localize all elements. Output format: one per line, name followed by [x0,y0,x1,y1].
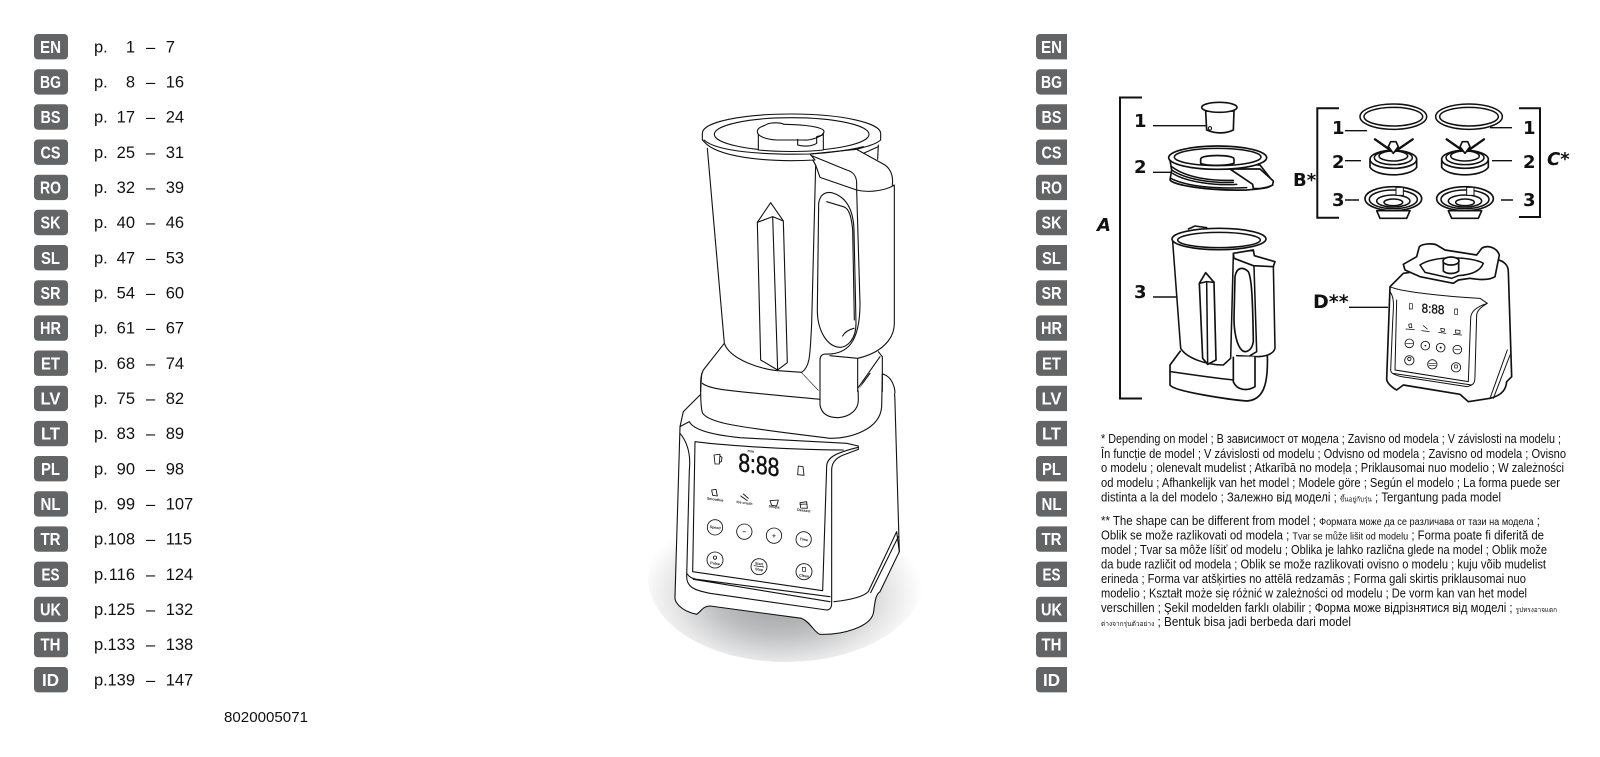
row SK: – [146,214,156,232]
display [1409,301,1458,317]
ground shadow [648,494,924,662]
row BG: 16 [166,73,184,91]
panel buttons: Start [755,561,764,567]
footnote: shape can be different: erineda ; Forma var atšķirties no attēlā redzamās ; Forma gali skirtis priklausomai nuo [1101,572,1526,586]
brackets and labels: C* [1547,149,1570,170]
row LV: LV [40,388,61,408]
row SR: – [146,285,156,303]
tab ES [1036,562,1067,587]
row LT: p. [94,425,108,443]
panel buttons: Stop [755,567,764,572]
footnote: depending on model: distinta a la del modelo ; Залежно від моделі ; ขึ้นอยู่กับรุ่น ; Tergantung pada model [1101,490,1501,504]
row UK: – [146,601,156,619]
panel buttons [707,520,812,580]
tab PL [1036,456,1067,481]
tab LT [1036,421,1067,446]
row CS: – [146,144,156,162]
row ID: – [146,671,156,689]
row PL: – [146,460,156,478]
row PL: 98 [166,460,184,478]
row HR: p. [94,320,108,338]
row BS: BS [40,107,60,127]
row PL: 90 [117,460,135,478]
tab RO [1036,175,1067,200]
tab TR [1036,526,1067,552]
panel buttons: − [742,529,746,536]
row SR: p. [94,285,108,303]
bracket and labels: 1 [1134,111,1147,132]
row SK: SK [40,213,61,233]
jug [701,114,894,392]
label and leader [1313,291,1388,313]
blade assembly C [1442,139,1488,175]
tab SK: SK [1042,213,1062,233]
row ID: ID [42,670,59,690]
brackets and labels: 1 [1523,118,1536,139]
row CS: CS [40,142,60,162]
row NL: NL [40,494,61,514]
tab SR: SR [1042,283,1062,303]
row SR: 54 [117,285,135,303]
row RO: p. [94,179,108,197]
jug handle opening [817,192,856,347]
row ES: 124 [166,566,193,584]
seal rings [1360,104,1502,129]
tab TR: TR [1042,529,1062,549]
panel icons [712,454,807,508]
row ID: p. [94,671,108,689]
row LV [34,386,184,411]
tab LT: LT [1042,424,1061,444]
footnote: shape can be different: modelio ; Kształt może się różnić w zależności od modelu ; De vorm kan van het model [1101,586,1527,600]
footnote: depending on model: od modelu ; Afhankelijk van het model ; Modele göre ; Según el modelo ; La forma puede ser [1101,476,1560,490]
parts groups B and C [1293,104,1570,218]
row LV: – [146,390,156,408]
tab BG: BG [1041,72,1062,92]
jug seat [701,373,895,438]
label and leader: D** [1313,291,1349,313]
row ET: ET [41,353,60,373]
row UK [34,597,193,622]
row SL: 53 [166,249,184,267]
row ET: – [146,355,156,373]
panel mode labels [707,497,811,514]
panel buttons: Pulse [710,561,720,566]
brackets and labels: B* [1293,170,1317,191]
row HR: HR [40,318,61,338]
tab ET [1036,350,1067,376]
row SR [34,280,184,306]
row ES: 116 [109,566,135,584]
small jug [1170,226,1275,401]
row BS: p. [94,109,108,127]
footnote: shape can be different [1101,514,1557,629]
display: 8:88 [1422,301,1444,317]
blender base with control panel [675,370,899,634]
seat handle block [820,370,858,418]
row TH [34,632,193,657]
row TR: 108 [107,531,135,549]
row ET: p. [94,355,108,373]
row SL: SL [41,248,60,268]
row NL [34,491,193,517]
row ES: p. [94,566,108,584]
row LT: 83 [117,425,135,443]
row SL [34,245,184,270]
tab ET: ET [1042,353,1061,373]
tab RO: RO [1041,178,1062,198]
row TH: TH [40,635,60,655]
row EN: 7 [166,38,175,56]
row ID: 139 [107,671,135,689]
jug rim [702,114,881,161]
tab LV [1036,386,1067,411]
footnote: depending on model [1100,432,1566,504]
tab HR [1036,315,1067,341]
row LT [34,421,184,446]
bracket and labels: A [1095,215,1111,236]
row LV: 82 [166,390,184,408]
panel mode labels: Dessert [797,508,811,514]
row ID [34,667,193,692]
panel display: min [747,449,754,454]
part D: motor base [1313,244,1512,402]
row TR: p. [94,531,108,549]
row BG [34,69,184,95]
row TR: 115 [166,531,192,549]
tab LV: LV [1042,388,1062,408]
row NL: 107 [166,496,193,514]
footnote: shape can be different: ต่างจากรุ่นตัวอย่าง ; Bentuk bisa jadi berbeda dari model [1101,615,1351,629]
locking ring C [1437,187,1493,218]
drive top [1403,244,1499,283]
tab TH: TH [1042,635,1062,655]
row ES [34,562,193,587]
row TR: TR [40,529,61,549]
panel mode labels: Soups [768,504,780,510]
panel display: 8:88 [738,447,779,483]
row ID: 147 [166,671,193,689]
row LT: – [146,425,156,443]
row EN: – [146,38,156,56]
row BS: 24 [166,109,184,127]
row RO: 39 [166,179,184,197]
row RO [34,175,184,200]
tab SL: SL [1042,248,1061,268]
row HR: – [146,320,156,338]
row EN: p. [94,38,108,56]
row CS: p. [94,144,108,162]
row ET: 68 [117,355,135,373]
row RO: 32 [117,179,135,197]
row UK: 125 [107,601,135,619]
brackets and labels: 2 [1332,152,1345,173]
row CS: 25 [117,144,135,162]
brackets and labels: 1 [1332,118,1345,139]
row EN [34,34,175,59]
row HR [34,315,184,341]
language index: left column [34,34,193,692]
panel mode labels: Smoothie [707,497,724,503]
row ES: – [146,566,156,584]
bracket and labels: 3 [1134,282,1147,303]
lid [1169,146,1273,190]
row LT: LT [41,424,60,444]
row SK: 46 [166,214,184,232]
tab SL [1036,245,1067,270]
tab PL: PL [1042,459,1061,479]
cap [1202,102,1237,133]
row SK: 40 [117,214,135,232]
row TH: 138 [166,636,193,654]
brackets and labels: 3 [1332,190,1345,211]
row TR: – [146,531,156,549]
tab NL [1036,491,1067,517]
row SR: SR [40,283,61,303]
row BS [34,104,184,130]
footnote: shape can be different: ** The shape can be different from model ; Формата може да се различава от тази на модела ; [1101,514,1540,528]
row BG: 8 [126,73,135,91]
tab UK [1036,597,1067,622]
tab BS: BS [1042,107,1062,127]
row BG: BG [40,72,61,92]
row NL: – [146,496,156,514]
row CS: 31 [166,144,184,162]
row TH: p. [94,636,108,654]
row EN: 1 [126,38,135,56]
tab SR [1036,280,1067,306]
row LV: p. [94,390,108,408]
panel mode labels: Ice crush [736,500,753,506]
brackets and labels: 2 [1523,152,1536,173]
locking ring B [1365,187,1422,218]
body [1387,260,1512,402]
row NL: p. [94,496,108,514]
row HR: 61 [117,320,135,338]
row RO: RO [40,178,61,198]
row HR: 67 [166,320,184,338]
blade assembly B [1370,139,1417,175]
tab TH [1036,632,1067,657]
row SL: 47 [117,249,135,267]
tab HR: HR [1041,318,1062,338]
brackets and labels: 3 [1523,190,1536,211]
tab UK: UK [1041,600,1062,620]
footnote: shape can be different: model ; Tvar sa môže líšiť od modelu ; Oblika je lahko različna glede na model ; Oblik može [1101,543,1547,557]
footnote: shape can be different: verschillen ; Şekil modelden farklı olabilir ; Форма може відрізнятися від моделі ; รูปทรงอาจแตก [1101,601,1557,615]
panel buttons: Time [799,537,808,542]
row ET: 74 [166,355,184,373]
row BS: – [146,109,156,127]
tab EN: EN [1041,37,1062,57]
row BS: 17 [117,109,135,127]
row PL [34,456,184,481]
row ET [34,350,184,376]
row UK: 132 [166,601,193,619]
row SK [34,210,184,235]
tab SK [1036,210,1067,235]
row SR: 60 [166,285,184,303]
right-side language tabs [1036,34,1067,692]
row UK: UK [40,600,61,620]
tab ES: ES [1042,564,1060,584]
tab CS [1036,140,1067,165]
row PL: PL [41,459,60,479]
tab NL: NL [1042,494,1062,514]
buttons [1405,339,1462,372]
tab BG [1036,69,1067,95]
main blender illustration [648,114,924,662]
row SK: p. [94,214,108,232]
tab ID: ID [1043,670,1060,690]
row CS [34,140,184,165]
panel buttons: + [772,533,776,540]
row LT: 89 [166,425,184,443]
row UK: p. [94,601,108,619]
row RO: – [146,179,156,197]
brackets and labels [1293,108,1570,218]
panel trim [1390,287,1510,398]
mode icons [1406,324,1462,335]
part 1: cap, part 2: lid, part 3: jug [1169,102,1275,401]
row LV: 75 [117,390,135,408]
row PL: p. [94,460,108,478]
row SL: – [146,249,156,267]
tab EN [1036,34,1067,59]
footnote: shape can be different: Oblik se može razlikovati od modela ; Tvar se může lišit od modelu ; Forma poate fi diferită de [1101,528,1544,542]
row TH: – [146,636,156,654]
tab ID [1036,667,1067,692]
row EN: EN [40,37,61,57]
row SL: p. [94,249,108,267]
footnote: shape can be different: da bude različit od modela ; Oblik se može razlikovati ovisno o modelu ; kuju võib mudelist [1101,558,1546,572]
panel buttons: Speed [709,525,721,530]
reference number: 8020005071 [224,709,308,726]
row ES: ES [42,564,60,584]
row NL: 99 [117,496,135,514]
parts group A [1095,98,1275,401]
bracket and labels: 2 [1134,157,1147,178]
tab BS [1036,104,1067,130]
measuring window [757,203,787,370]
row TH: 133 [107,636,135,654]
jug lid knob [758,130,823,151]
panel buttons: Clean [799,573,809,579]
row BG: p. [94,73,108,91]
bracket and labels [1095,98,1207,398]
row TR [34,526,192,552]
row BG: – [146,73,156,91]
tab CS: CS [1042,142,1062,162]
